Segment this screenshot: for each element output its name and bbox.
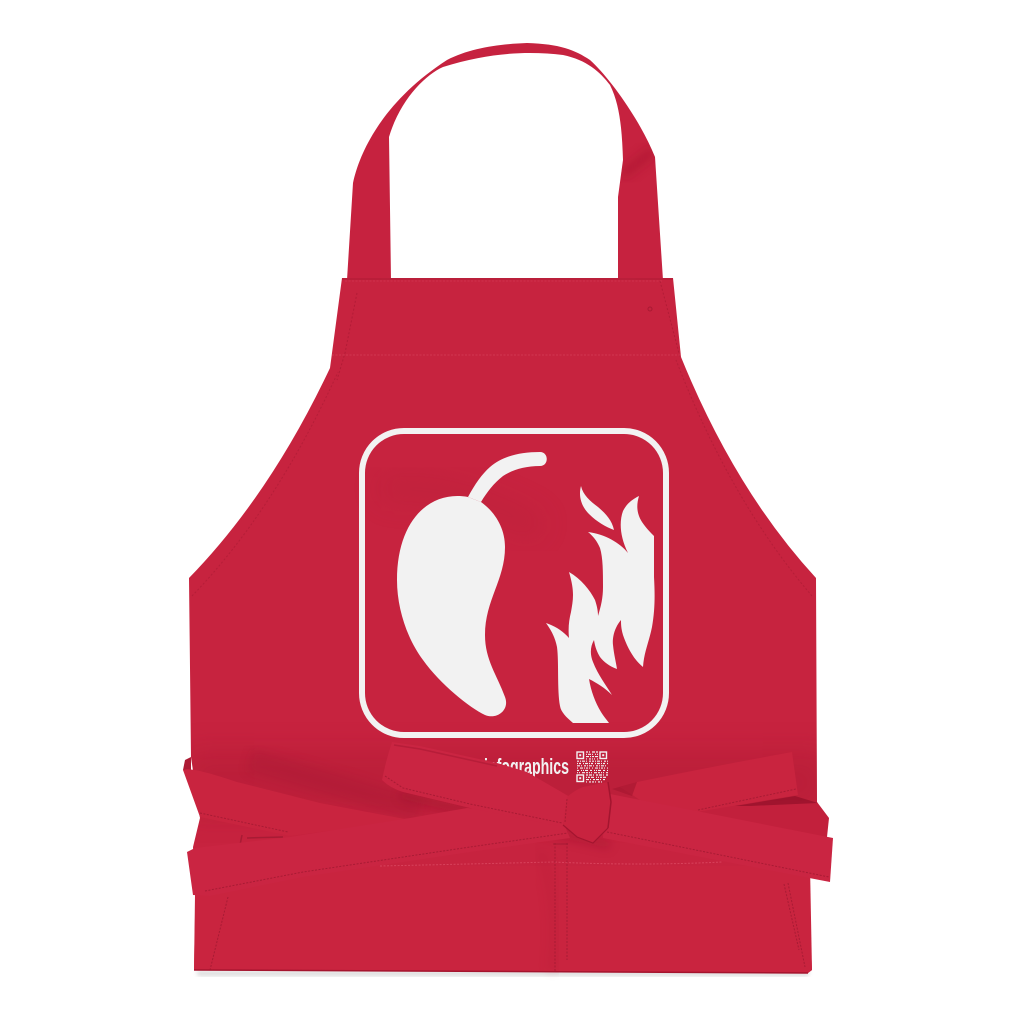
waist tie: long left tail xyxy=(187,808,570,896)
ground shadow xyxy=(196,971,810,976)
bow: left loop xyxy=(382,742,570,827)
lower pocket panel xyxy=(194,835,812,973)
icon: chili pepper xyxy=(397,452,547,716)
side fold flap xyxy=(183,757,191,774)
strap button xyxy=(648,307,652,311)
apron product illustration xyxy=(183,43,833,977)
pepper body xyxy=(397,496,506,716)
flame body xyxy=(546,496,655,723)
icon: rounded square frame xyxy=(362,431,666,735)
icon: flames xyxy=(546,486,655,723)
apron bib and body xyxy=(183,278,830,973)
pepper stem xyxy=(468,452,547,502)
waist tie: right band behind xyxy=(697,796,829,838)
waist tie: long right tail xyxy=(603,793,833,882)
shadow under bow xyxy=(400,795,610,845)
waist tie: left band behind xyxy=(183,769,410,836)
flame droplet xyxy=(580,486,614,530)
brand text: infographics xyxy=(484,754,569,779)
bow: knot xyxy=(563,782,611,843)
QR code xyxy=(577,752,608,782)
bow: right loop xyxy=(612,752,798,812)
neck strap xyxy=(347,43,663,280)
pocket corner detail xyxy=(240,835,283,845)
